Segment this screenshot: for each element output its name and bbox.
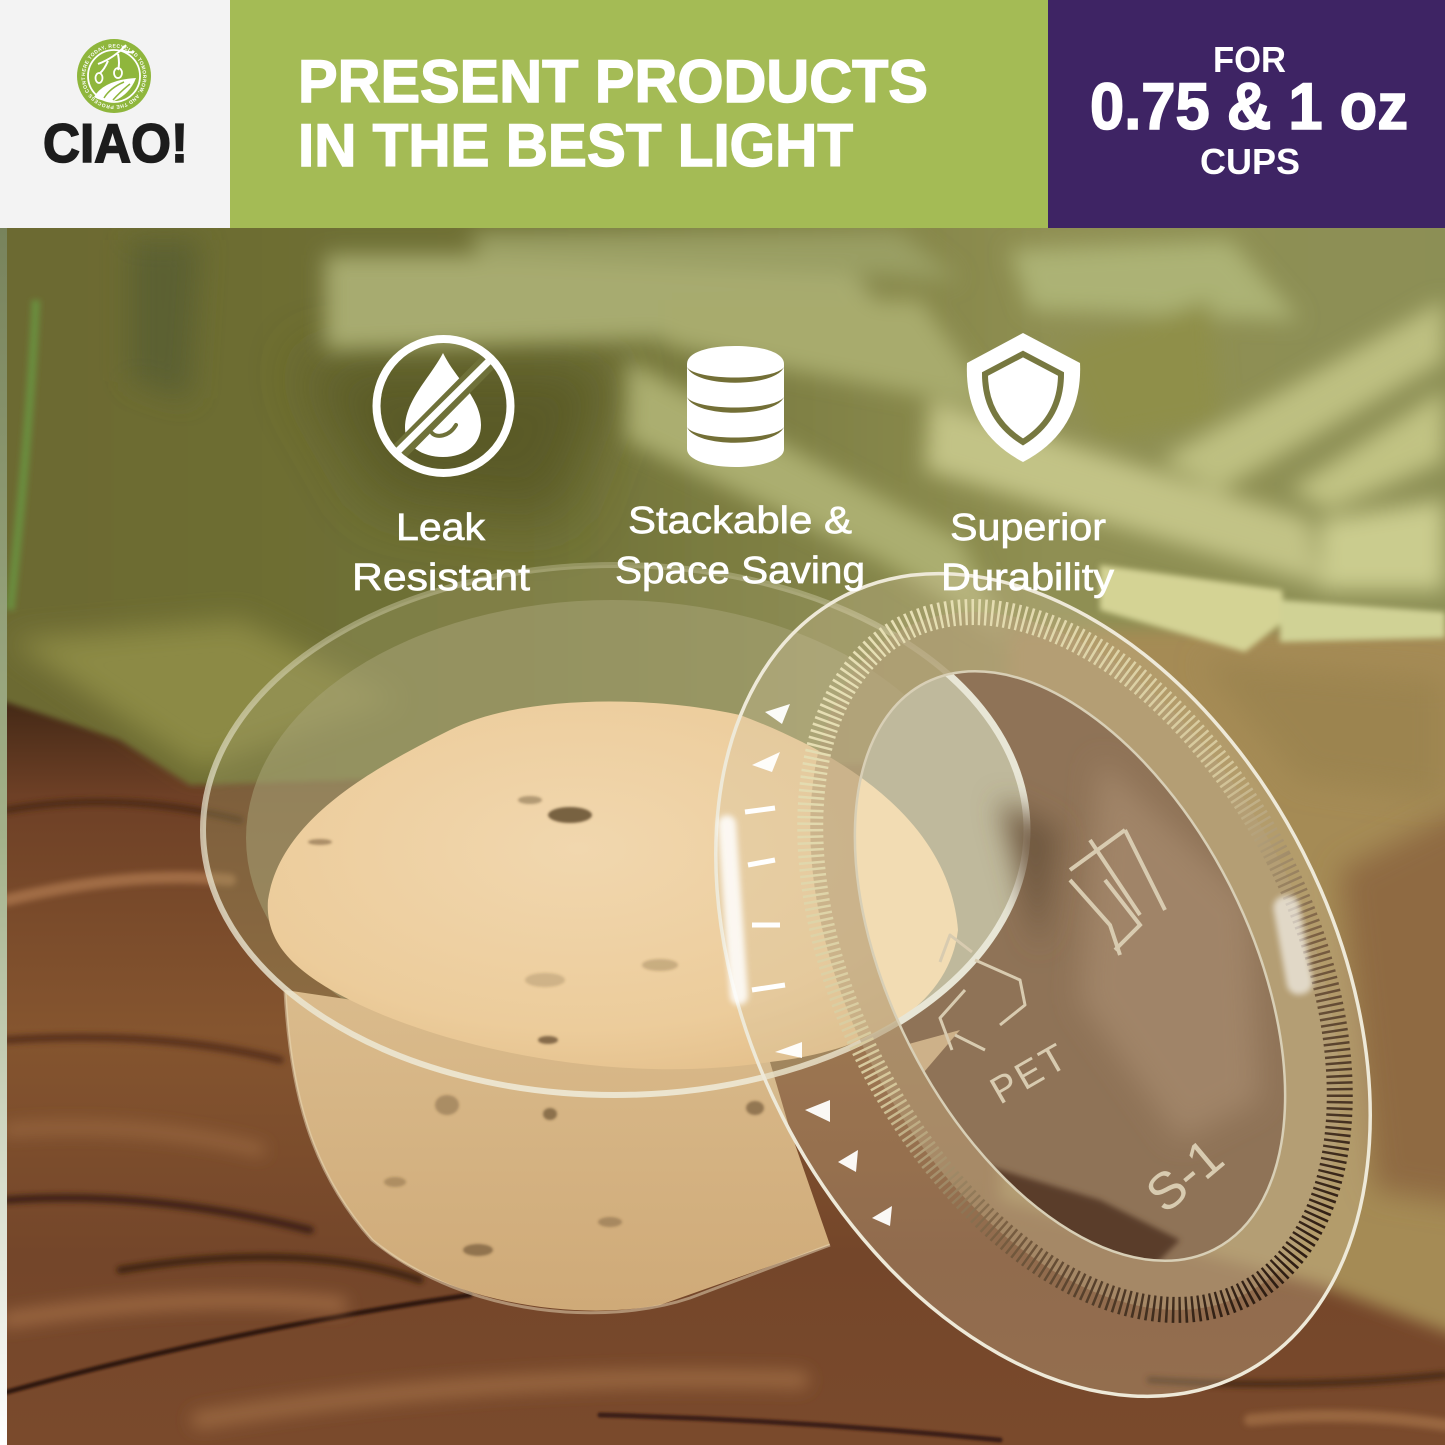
- feature: durability: [941, 333, 1114, 599]
- lid flat ring: [702, 524, 1445, 1398]
- burlap napkin: [1000, 630, 1445, 1352]
- icon: stacked discs: [687, 346, 784, 467]
- sauce body: [285, 990, 830, 1311]
- cloth backdrop: [0, 200, 1445, 785]
- lid ribbed ring: [702, 524, 1445, 1398]
- cup lower wall: [285, 990, 830, 1313]
- label: Stackable &: [628, 500, 852, 542]
- cup inner wall: [246, 600, 978, 1076]
- cloth fold shading: [10, 620, 400, 770]
- label: Resistant: [352, 557, 530, 599]
- logo panel: [0, 0, 230, 228]
- lid outer: [584, 463, 1445, 1445]
- wood grain: [7, 802, 1445, 1440]
- feature row: [352, 333, 1114, 599]
- size text: CUPS: [1200, 141, 1300, 182]
- sharper front fries: [1100, 565, 1445, 652]
- lid highlights: [717, 808, 1314, 1005]
- feature: stackable: [615, 346, 865, 592]
- lid notches: [752, 704, 892, 1226]
- headline: IN THE BEST LIGHT: [298, 112, 853, 179]
- label: Superior: [950, 507, 1106, 549]
- cup rim back: [203, 565, 1027, 1095]
- header band: [0, 0, 1445, 228]
- feature: leak resistant: [352, 339, 530, 599]
- sauce top surface: [268, 701, 958, 1069]
- icon: shield: [967, 333, 1080, 462]
- icon: crossed-out water drop: [376, 339, 510, 473]
- recycle symbol and PET mark: PET: [984, 1035, 1076, 1113]
- green headline panel: [230, 0, 1048, 228]
- logo badge: [77, 39, 151, 113]
- size text: FOR: [1213, 39, 1286, 80]
- cup rim: [203, 565, 1027, 1095]
- size text: [1090, 39, 1408, 182]
- utensil symbol: [1070, 830, 1165, 955]
- label: [615, 500, 865, 592]
- S-1 mark: S-1: [1135, 1128, 1235, 1224]
- blurred fries: [325, 232, 1445, 640]
- headline: [298, 48, 928, 179]
- label: Durability: [941, 557, 1114, 599]
- plastic sauce cup: [203, 565, 1027, 1313]
- label: [941, 507, 1114, 599]
- label: [352, 507, 530, 599]
- logo wordmark: CIAO!: [43, 112, 188, 174]
- headline: PRESENT PRODUCTS: [298, 48, 928, 115]
- lid disc: [856, 672, 1284, 1260]
- recycle symbol and PET mark: [940, 935, 1076, 1113]
- size text: 0.75 & 1 oz: [1090, 69, 1408, 143]
- lid disc edge: [766, 601, 1374, 1331]
- purple size panel: [1048, 0, 1445, 228]
- wood table: [7, 690, 1445, 1445]
- sauce specks: [308, 796, 764, 1256]
- lid: [714, 572, 1372, 1398]
- label: Space Saving: [615, 550, 865, 592]
- label: Leak: [396, 507, 486, 549]
